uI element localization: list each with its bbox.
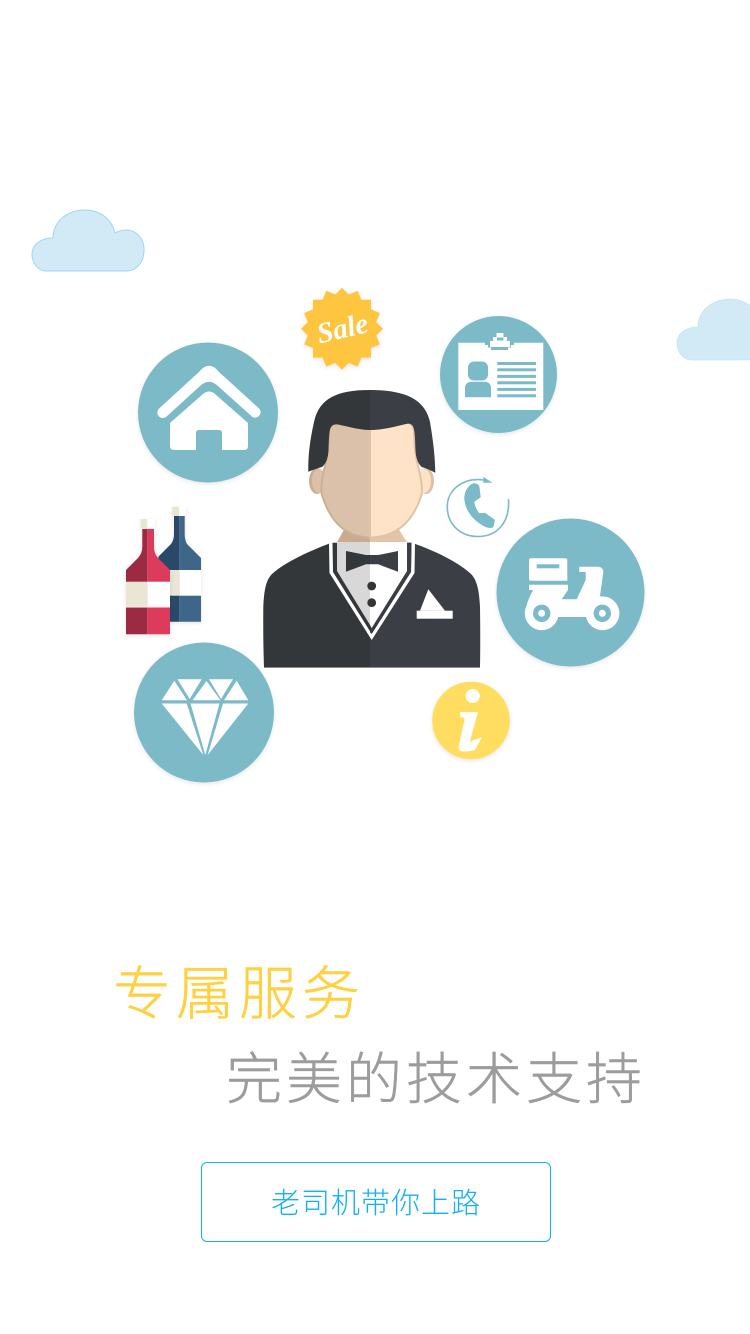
suit jacket xyxy=(263,543,480,668)
button label: 老司机带你上路 xyxy=(271,1188,481,1220)
icon: info circle xyxy=(432,682,510,759)
illustration xyxy=(32,210,750,785)
icon: phone with arrow xyxy=(447,477,509,536)
hair xyxy=(308,390,435,473)
icon: red wine bottle xyxy=(126,519,170,634)
man in tuxedo xyxy=(263,390,480,668)
face xyxy=(321,422,422,538)
bow tie xyxy=(346,551,398,572)
icon: sale badge: Sale xyxy=(314,307,371,350)
cloud: right xyxy=(677,299,750,360)
neck xyxy=(336,528,408,553)
button xyxy=(201,1162,551,1242)
icon: blue wine bottle xyxy=(158,507,201,622)
cloud: left xyxy=(32,210,144,271)
icon: scooter circle xyxy=(496,518,644,666)
shirt and lapels xyxy=(329,542,415,640)
subheading: perfect technical support: 完美的技术支持 xyxy=(226,1048,646,1111)
icon: sale badge xyxy=(301,288,383,370)
icon: house circle xyxy=(138,342,278,482)
icon: diamond circle xyxy=(134,642,274,782)
icon: id card circle xyxy=(440,316,557,433)
shirt buttons xyxy=(367,582,376,607)
heading: exclusive service: 专属服务 xyxy=(113,962,365,1027)
pocket square xyxy=(417,589,453,619)
ears xyxy=(309,468,434,494)
